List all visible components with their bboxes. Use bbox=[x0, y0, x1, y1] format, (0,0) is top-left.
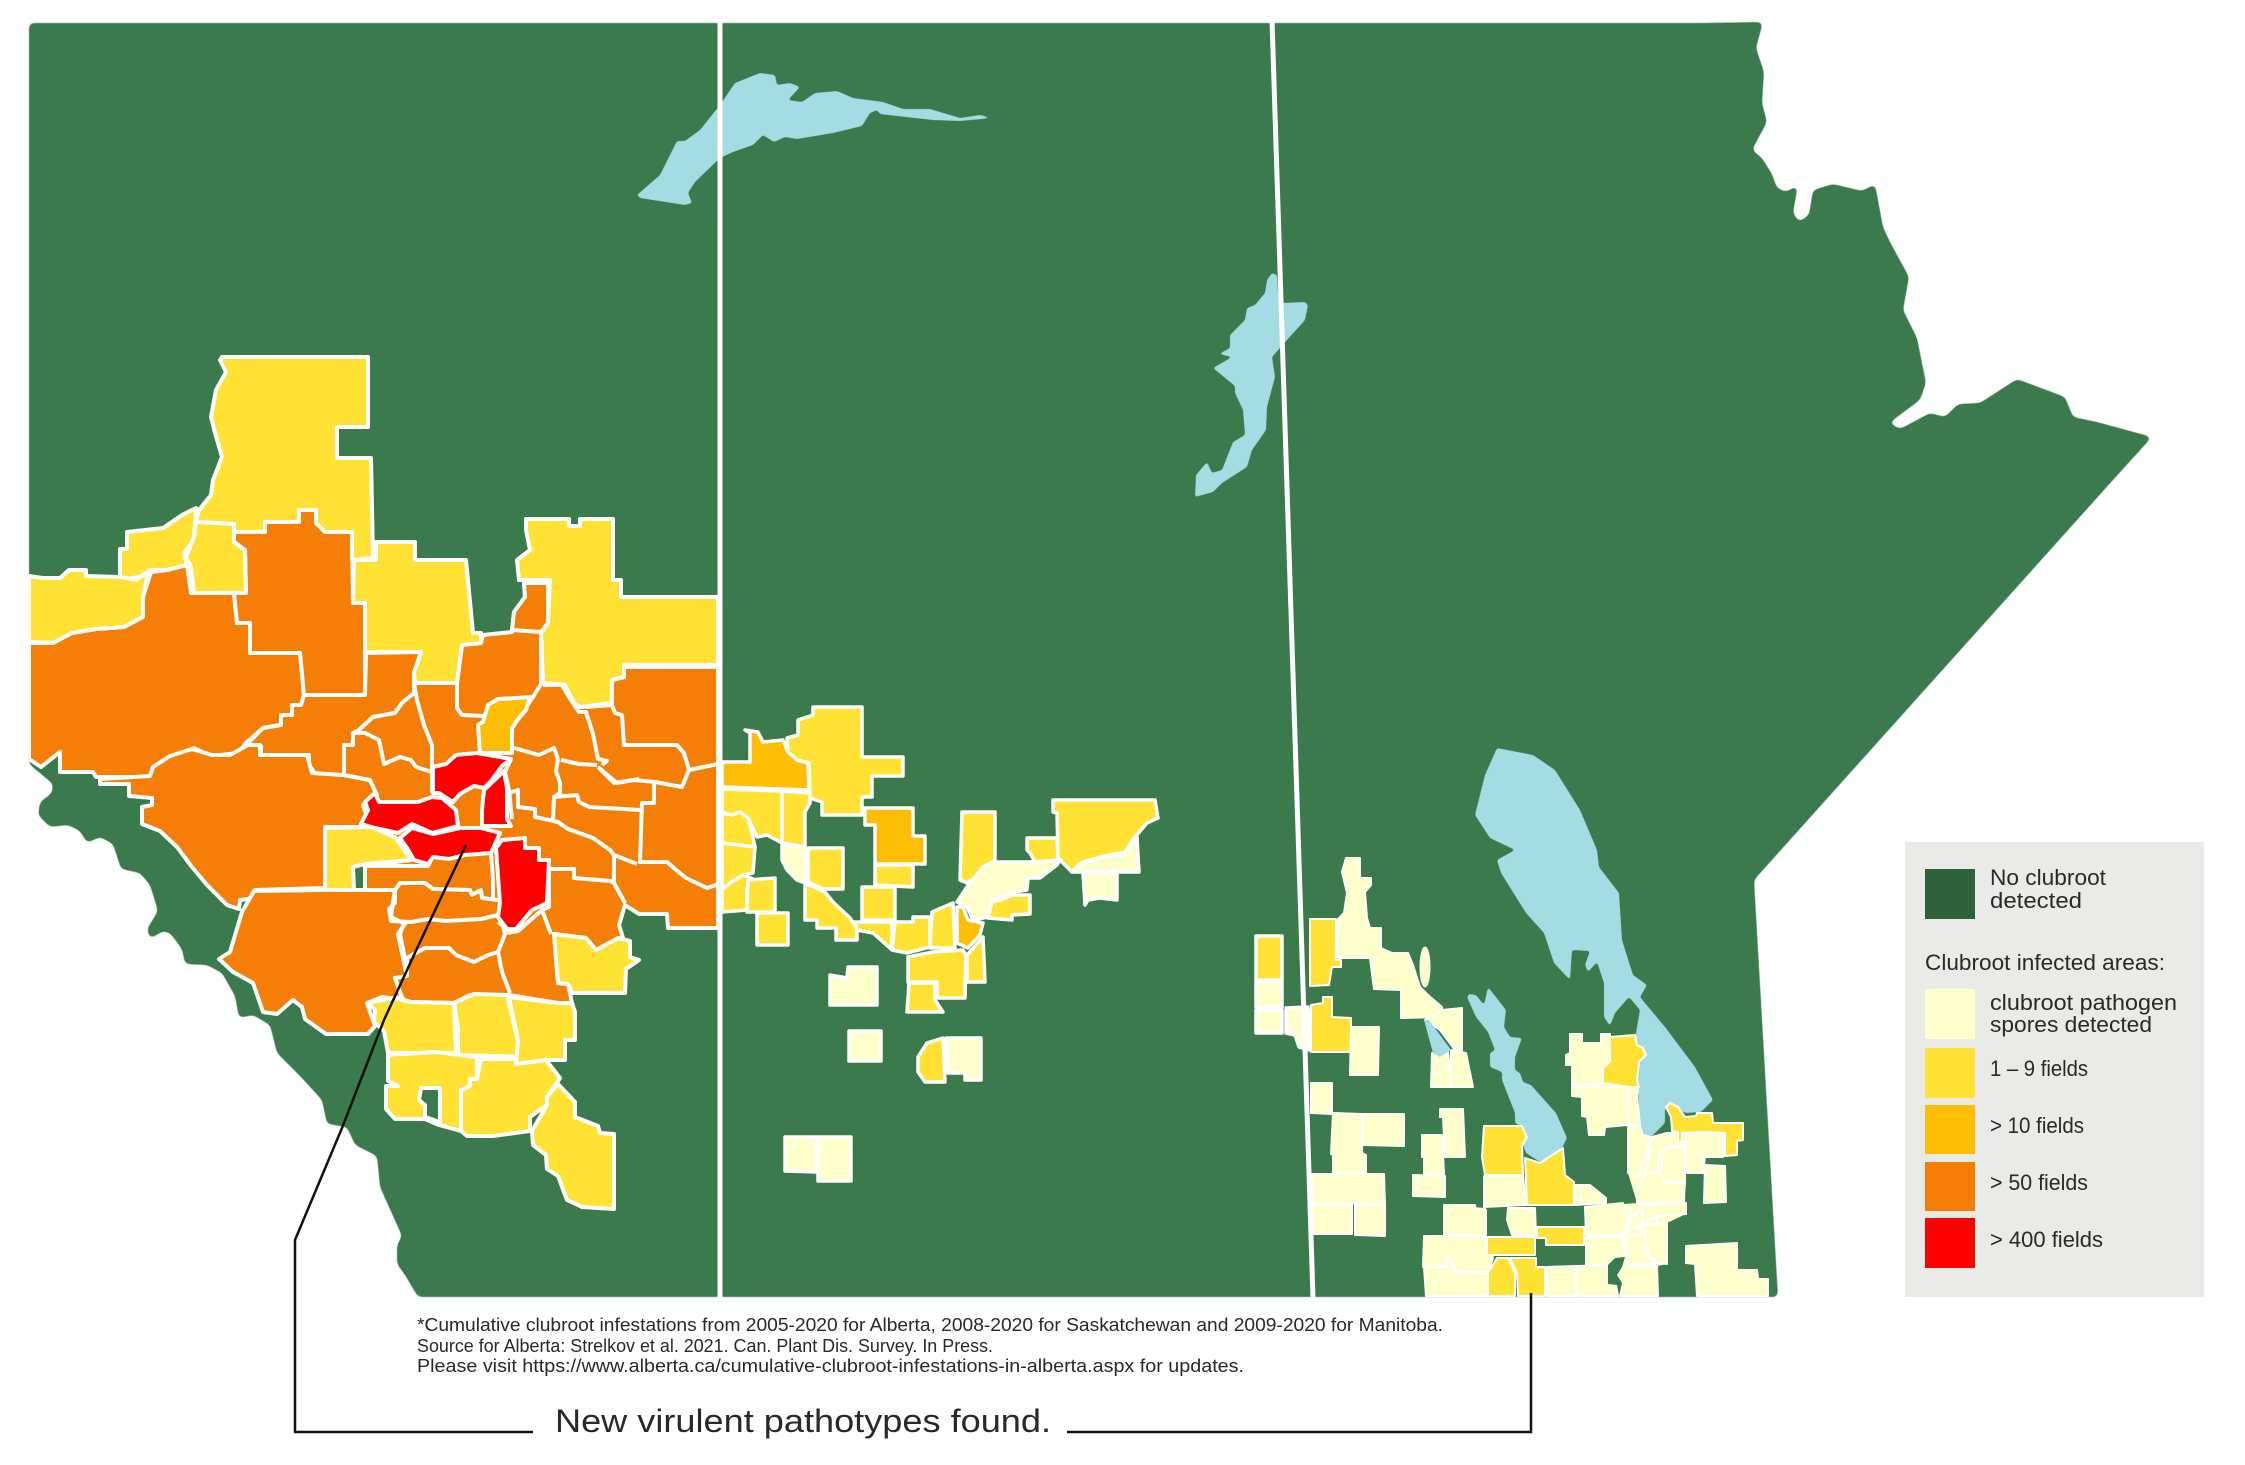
yellow: west of Lake Winnipeg bbox=[1603, 1035, 1646, 1087]
orange: north narrow bbox=[512, 583, 548, 632]
legend heading: Clubroot infected areas: bbox=[1925, 950, 2165, 975]
yellow: north bbox=[196, 357, 373, 560]
yellow: far south bbox=[532, 1084, 614, 1209]
provincial border: Saskatchewan / Manitoba bbox=[1272, 20, 1313, 1298]
legend: spores detected: spores detected bbox=[1990, 1012, 2152, 1037]
yellow: south-east of Lake Winnipeg bbox=[1666, 1103, 1743, 1156]
callout text: New virulent pathotypes found. bbox=[555, 1403, 1051, 1439]
lake: Athabasca bbox=[637, 73, 992, 205]
amber: centre bbox=[865, 808, 925, 864]
orange: west centre bbox=[100, 745, 377, 909]
orange: north centre bbox=[234, 510, 365, 695]
yellow: small north bbox=[186, 522, 246, 593]
lakes bbox=[637, 73, 1713, 1162]
yellow: south east of centre bbox=[554, 934, 639, 993]
yellow: north east bbox=[517, 519, 718, 707]
lake: Winnipeg bbox=[1475, 748, 1713, 1137]
legend: over 50 fields bbox=[1925, 1162, 2088, 1211]
legend: over 50 fields: > 50 fields bbox=[1990, 1170, 2088, 1195]
west Manitoba-border block bbox=[1256, 936, 1282, 980]
yellow: south row 1 bbox=[368, 998, 456, 1053]
orange: south west bbox=[219, 890, 407, 1034]
legend: 1-9 fields: 1 – 9 fields bbox=[1990, 1056, 2088, 1081]
lake: Reindeer bbox=[1195, 273, 1308, 497]
isolated spore detections bbox=[830, 967, 877, 1005]
legend: over 10 fields: > 10 fields bbox=[1990, 1113, 2084, 1138]
legend: no clubroot bbox=[1925, 865, 2106, 919]
amber: east bbox=[957, 907, 983, 948]
callout line: new virulent pathotypes bbox=[295, 845, 533, 1432]
internal boundaries bbox=[353, 683, 719, 993]
footnote bbox=[417, 1315, 1443, 1376]
pale cluster underlays bbox=[1423, 1060, 1723, 1296]
yellow: west edge bbox=[29, 570, 148, 643]
legend: over 10 fields bbox=[1925, 1105, 2084, 1154]
land gap in pale cluster bbox=[1608, 1257, 1625, 1296]
lake: Winnipegosis bbox=[1467, 987, 1567, 1162]
legend: 1-9 fields bbox=[1925, 1048, 2088, 1098]
legend bbox=[1905, 842, 2204, 1297]
yellow: south row 2 bbox=[386, 1052, 477, 1131]
legend: over 400 fields bbox=[1925, 1218, 2103, 1268]
amber: west bbox=[722, 730, 809, 790]
footnote: *Cumulative clubroot infestations from 2005-2020 for Alberta, 2008-2020 for Saskatchewan and 2009-2020 for Manitoba. bbox=[417, 1315, 1443, 1335]
yellow: north centre bbox=[353, 542, 481, 683]
red fields bbox=[361, 753, 549, 929]
orange: west bbox=[29, 565, 304, 777]
yellow: north west strip bbox=[120, 508, 196, 580]
callout line: right side bbox=[1067, 1293, 1531, 1432]
legend: no clubroot: detected bbox=[1990, 888, 2082, 913]
provincial border: Alberta / Saskatchewan bbox=[718, 20, 722, 1298]
legend: spores detected: clubroot pathogen bbox=[1990, 990, 2177, 1015]
Alberta infected municipalities bbox=[29, 357, 719, 1209]
footnote: Source for Alberta: Strelkov et al. 2021. Can. Plant Dis. Survey. In Press. bbox=[417, 1336, 993, 1356]
Saskatchewan infected municipalities bbox=[722, 707, 1310, 1181]
Manitoba infected municipalities bbox=[1310, 858, 1768, 1296]
orange: central block with internal boundaries bbox=[344, 583, 718, 1003]
yellow: central west bbox=[325, 827, 411, 890]
yellow: large east bbox=[1053, 800, 1158, 872]
legend: no clubroot: No clubroot bbox=[1990, 865, 2106, 890]
legend: over 400 fields: > 400 fields bbox=[1990, 1227, 2103, 1252]
thin pale sliver beside the lake bbox=[1420, 947, 1430, 987]
small lake bbox=[1424, 1020, 1451, 1057]
land gap inside yellow bbox=[419, 1088, 440, 1122]
orange: central north bbox=[246, 652, 421, 775]
footnote: Please visit https://www.alberta.ca/cumulative-clubroot-infestations-in-alberta.aspx for updates. bbox=[417, 1356, 1244, 1376]
legend: spores detected bbox=[1925, 989, 2177, 1039]
amber: centre bbox=[478, 697, 530, 753]
